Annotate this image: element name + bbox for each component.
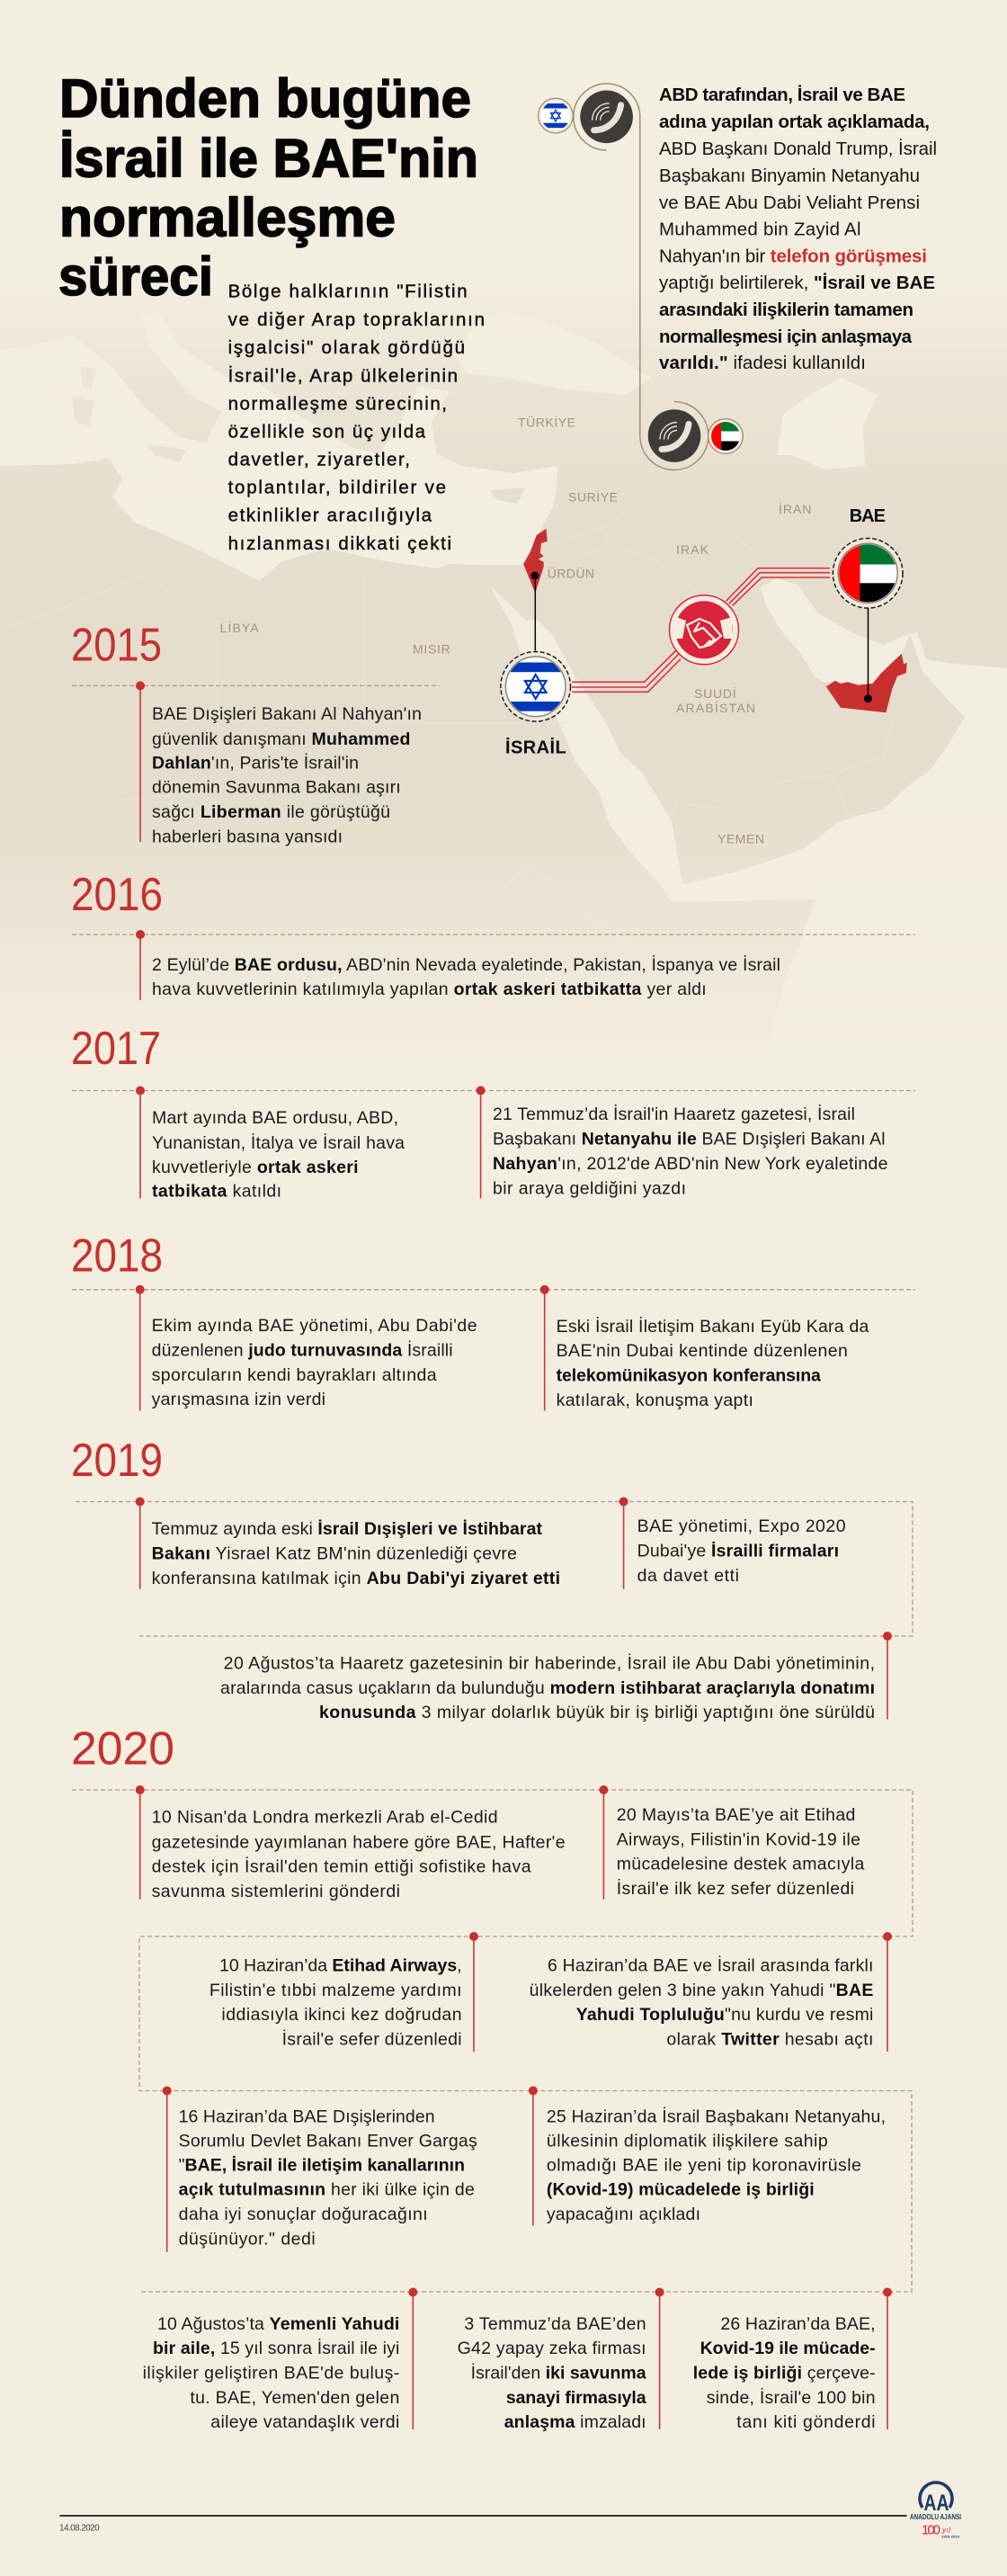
row 3: (Kovid-19) mücadelede iş birliği [547,2180,815,2200]
row 3: açık tutulmasının her iki ülke için de [179,2180,475,2200]
event text right: da davet etti [637,1566,739,1586]
date: 14.08.2020 [59,2524,100,2534]
map labels: ARABİSTAN [676,700,755,715]
map labels: SURİYE [568,489,618,504]
row 3: 16 Haziran’da BAE Dışişlerinden [179,2106,435,2126]
year 2015: 2015 [71,620,162,672]
event text: güvenlik danışmanı Muhammed [152,729,410,749]
section: 2017 [71,1023,915,1202]
event text right: Başbakanı Netanyahu ile BAE Dışişleri Bakanı Al [493,1130,886,1149]
lead text: hızlanması dikkati çekti [228,533,451,554]
row 4: bir aile, 15 yıl sonra İsrail ile iyi [153,2338,399,2358]
lead text: ve diğer Arap topraklarının [228,309,485,330]
event text right [493,1104,888,1199]
event text left: kuvvetleriyle ortak askeri [152,1158,359,1177]
phone call statement text: arasındaki ilişkilerin tamamen [659,300,913,320]
event text right: Nahyan'ın, 2012'de ABD'nin New York eyaletinde [493,1154,888,1174]
icon: UAE small flag [708,419,743,453]
pin lines [530,572,872,702]
event text right: 21 Temmuz’da İsrail'in Haaretz gazetesi, İsrail [493,1104,855,1124]
event text bottom: 20 Ağustos’ta Haaretz gazetesinin bir haberinde, İsrail ile Abu Dabi yönetiminin, [224,1653,875,1673]
row 1: 10 Nisan'da Londra merkezli Arab el-Cedid [152,1808,498,1828]
row 4: 26 Haziran’da BAE, [720,2314,876,2334]
lead text: toplantılar, bildiriler ve [228,478,446,498]
event text left [152,1518,560,1588]
row 3: "BAE, İsrail ile iletişim kanallarının [179,2155,465,2176]
row 2: Yahudi Topluluğu"nu kurdu ve resmi [576,2005,873,2025]
lead text: normalleşme sürecinin, [228,394,447,414]
title: Dünden bugüne [59,68,471,129]
title: normalleşme [59,187,396,247]
footer rule [59,2515,907,2517]
map shape: Israel [523,529,548,593]
event text left: Mart ayında BAE ordusu, ABD, [152,1108,398,1128]
row 3: Sorumlu Devlet Bakanı Enver Gargaş [179,2132,477,2151]
phone call statement text: ABD Başkanı Donald Trump, İsrail [659,139,937,159]
lead text: İsrail'le, Arap ülkelerinin [228,365,458,387]
event text [152,704,422,846]
label: BAE: BAE [850,506,886,526]
section: 2018 [71,1230,915,1410]
section: 2020 [71,1723,913,2432]
phone call statement text: Muhammed bin Zayid Al [659,219,861,240]
row 3: olmadığı BAE ile yeni tip koronavirüsle [547,2156,861,2176]
event text: Dahlan'ın, Paris'te İsrail'in [152,753,359,774]
row 2: 10 Haziran’da Etihad Airways, [219,1956,462,1976]
event text left: Bakanı Yisrael Katz BM'nin düzenlediği çevre [152,1543,517,1563]
row 4: 3 Temmuz’da BAE’den [464,2314,646,2334]
icon: UAE flag [833,538,903,608]
row 1: Airways, Filistin'in Kovid-19 ile [617,1829,860,1849]
logo: Anadolu Ajansı: AA [924,2491,949,2516]
row 1: destek için İsrail'den temin ettiği sofistike hava [152,1856,531,1877]
row 4: ilişkiler geliştiren BAE'de buluş- [143,2364,399,2384]
event text: 2 Eylül’de BAE ordusu, ABD'nin Nevada eyaletinde, Pakistan, İspanya ve İsrail [152,954,780,975]
event text right [637,1516,846,1586]
logo: Anadolu Ajansı [910,2482,961,2539]
row 4: tanı kiti gönderdi [736,2412,876,2432]
event text right: BAE yönetimi, Expo 2020 [637,1516,846,1536]
event text left: sporcuların kendi bayrakları altında [152,1365,437,1385]
row 2: ülkelerden gelen 3 bine yakın Yahudi "BAE [530,1981,873,2000]
phone call connector line [574,84,708,470]
row 3: ülkesinin diplomatik ilişkilere sahip [547,2132,828,2151]
logo: Anadolu Ajansı: 1920-2020 [941,2535,960,2539]
event text right: katılarak, konuşma yaptı [557,1391,753,1410]
row 3: daha iyi sonuçlar doğuracağını [179,2205,428,2224]
icon: phone top [580,90,633,143]
event text left: Temmuz ayında eski İsrail Dışişleri ve İstihbarat [152,1518,543,1539]
logo: Anadolu Ajansı: ANADOLU AJANSI [910,2513,961,2521]
lead text: etkinlikler aracılığıyla [228,505,432,526]
row 2: İsrail'e sefer düzenledi [282,2029,462,2050]
background map [0,360,1007,947]
row 1 [136,1785,865,1901]
logo: Anadolu Ajansı: 100 [922,2523,940,2538]
row 4: sanayi firmasıyla [506,2388,646,2408]
event text: sağcı Liberman ile görüştüğü [152,802,390,822]
event text left: yarışmasına izin verdi [152,1390,325,1409]
row 1: mücadelesine destek amacıyla [617,1855,865,1874]
row 4 [143,2288,892,2432]
year 2020: 2020 [71,1723,174,1775]
map labels: MISIR [413,642,450,657]
icon: phone bottom [648,409,700,462]
row 4: sinde, İsrail'e 100 bin [707,2387,876,2408]
icon: handshake [669,595,739,665]
lead text: işgalcisi" olarak gördüğü [228,337,465,358]
phone call statement text: Başbakanı Binyamin Netanyahu [659,165,920,186]
phone call statement text: varıldı." ifadesi kullanıldı [659,353,866,373]
connector lines [572,568,830,692]
event text left [152,1108,405,1202]
event text [152,954,780,999]
logo: Anadolu Ajansı: yıl [941,2526,950,2535]
event text: haberleri basına yansıdı [152,827,343,846]
row 3 [163,2087,886,2252]
event text right: telekomünikasyon konferansına [557,1366,821,1386]
row 4: 10 Ağustos’ta Yemenli Yahudi [157,2314,399,2334]
year 2016: 2016 [71,869,163,921]
event text left: tatbikata katıldı [152,1182,281,1202]
event text right [557,1316,869,1410]
row 4: İsrail'den iki savunma [471,2363,646,2384]
event text left: Yunanistan, İtalya ve İsrail hava [152,1132,405,1153]
event text right: Eski İsrail İletişim Bakanı Eyüb Kara da [557,1316,869,1337]
event text: BAE Dışişleri Bakanı Al Nahyan'ın [152,704,422,724]
row 3: 25 Haziran’da İsrail Başbakanı Netanyahu, [547,2106,886,2126]
event text right: bir araya geldiğini yazdı [493,1179,686,1199]
year 2017: 2017 [71,1023,161,1075]
row 2: iddiasıyla ikinci kez doğrudan [221,2005,462,2025]
label: İsrail: İSRAİL [505,738,566,758]
map labels: IRAK [676,542,709,557]
phone call statement text: normalleşmesi için anlaşmaya [659,326,913,347]
event text right: Dubai'ye İsrailli firmaları [637,1540,839,1561]
section: 2016 [71,869,915,1000]
lead text: özellikle son üç yılda [228,421,426,443]
row 2: 6 Haziran’da BAE ve İsrail arasında farklı [548,1955,873,1976]
row 4: tu. BAE, Yemen'den gelen [190,2388,399,2408]
map labels: SUUDİ [694,685,736,701]
row 1: 20 Mayıs’ta BAE’ye ait Etihad [617,1805,855,1825]
map labels: ÜRDÜN [548,566,594,581]
phone call statement text: adına yapılan ortak açıklamada, [659,112,930,132]
map labels: TÜRKİYE [518,414,575,429]
map shape: UAE [824,654,907,712]
lead text: davetler, ziyaretler, [228,450,410,470]
phone call statement text [659,85,937,373]
event text left: konferansına katılmak için Abu Dabi'yi ziyaret etti [152,1569,560,1588]
icon: Israel small flag [539,98,573,133]
row 2: Filistin'e tıbbi malzeme yardımı [209,1981,462,2000]
event text bottom: konusunda 3 milyar dolarlık büyük bir iş birliği yaptığını öne sürüldü [319,1703,875,1722]
row 2 [209,1932,892,2052]
row 1: savunma sistemlerini gönderdi [152,1882,400,1901]
map labels: YEMEN [717,832,764,846]
phone call statement text: ve BAE Abu Dabi Veliaht Prensi [659,192,920,213]
event text bottom: aralarında casus uçakların da bulunduğu modern istihbarat araçlarıyla donatımı [220,1678,875,1698]
phone call statement text: Nahyan'ın bir telefon görüşmesi [659,246,927,266]
title: İsrail ile BAE'nin [59,129,478,189]
event text left: Ekim ayında BAE yönetimi, Abu Dabi'de [152,1316,477,1336]
phone call statement text: yaptığı belirtilerek, "İsrail ve BAE [659,273,935,293]
lead text: Bölge halklarının "Filistin [228,282,468,302]
event text: dönemin Savunma Bakanı aşırı [152,778,401,798]
row 4: G42 yapay zeka firması [458,2339,646,2358]
row 4: anlaşma imzaladı [504,2412,646,2432]
year 2018: 2018 [71,1230,163,1283]
row 4: lede iş birliği çerçeve- [693,2364,876,2384]
row 1: İsrail'e ilk kez sefer düzenledi [617,1878,854,1899]
icon: Israel flag [501,651,570,721]
map labels [220,414,811,846]
row 4: aileye vatandaşlık verdi [210,2412,399,2432]
event text left: düzenlenen judo turnuvasında İsrailli [152,1340,453,1360]
event text left [152,1316,477,1409]
section: 2015 [71,620,440,846]
section: 2019 [71,1435,913,1722]
row 3: yapacağını açıkladı [547,2205,700,2224]
year 2019: 2019 [71,1435,163,1487]
row 4: Kovid-19 ile mücade- [700,2339,876,2358]
event text bottom [220,1653,875,1722]
row 3: düşünüyor." dedi [179,2229,316,2249]
event text: hava kuvvetlerinin katılımıyla yapılan ortak askeri tatbikatta yer aldı [152,979,707,999]
map labels: İRAN [779,501,811,516]
title: süreci [58,246,213,307]
lead text [228,282,485,554]
map labels: LİBYA [220,620,259,635]
row 2: olarak Twitter hesabı açtı [666,2030,873,2050]
title [58,68,478,307]
row 1: gazetesinde yayımlanan habere göre BAE, Hafter'e [152,1832,566,1852]
phone call statement text: ABD tarafından, İsrail ve BAE [659,85,905,105]
event text right: BAE'nin Dubai kentinde düzenlenen [557,1341,848,1361]
